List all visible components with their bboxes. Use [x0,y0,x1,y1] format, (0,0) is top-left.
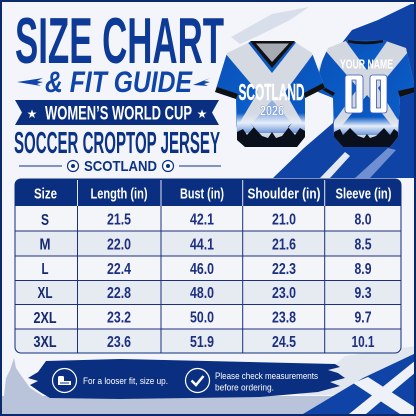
ribbon banner [15,100,219,125]
row L: 22.3 [272,261,296,278]
header labels [34,186,392,202]
row L: 46.0 [190,261,214,278]
star left: ★ [27,107,37,121]
row XL [38,285,372,302]
tip: check measurements [215,371,318,394]
icon: check mark [186,368,210,392]
Scotland label with footballs: SCOTLAND [84,158,157,175]
row M: 21.6 [272,236,296,254]
row L: 8.9 [354,261,372,278]
tip: looser fit: For a looser fit, size up. [83,376,168,387]
jersey: front [215,41,325,147]
row 3XL: 23.6 [107,334,131,351]
table body [15,179,401,353]
row S: 42.1 [190,212,214,228]
star right: ★ [197,107,207,121]
row 3XL: 24.5 [272,334,296,351]
row 2XL: 50.0 [190,310,214,326]
front year: 2026 [260,102,284,120]
row M: 44.1 [190,236,214,254]
header labels: Bust (in) [180,186,224,202]
background: blue brush stroke [231,4,416,178]
row 3XL: 51.9 [190,334,214,351]
row S: 8.0 [354,212,372,228]
row XL: 22.8 [107,285,131,302]
row M [40,236,372,254]
banner text: WOMEN’S WORLD CUP [45,104,192,124]
subtitle: fit guide: & FIT GUIDE [45,66,193,99]
row 2XL: 2XL [34,310,57,327]
Scotland flag corner [303,353,416,414]
front team name: SCOTLAND [238,79,304,105]
row XL: XL [38,285,53,302]
row XL: 23.0 [272,285,296,302]
header labels: Sleeve (in) [336,186,392,202]
tip: check measurements: Please check measurements [215,371,318,382]
row S: S [41,212,49,229]
row 2XL: 23.8 [272,310,296,326]
header labels: Size [34,186,57,202]
row 2XL: 23.2 [107,310,131,326]
row 2XL [34,310,372,327]
jersey: back [318,40,414,147]
row L [42,261,372,278]
row M: 8.5 [354,236,372,254]
row M: M [40,236,50,254]
table header [15,179,401,206]
Scotland label with footballs [19,158,221,175]
row 3XL [34,334,375,351]
row 3XL: 3XL [34,334,57,351]
row S: 21.5 [107,212,131,228]
footer brush banner [28,359,345,399]
size table [15,179,401,353]
header labels: Shoulder (in) [248,186,320,202]
row L: 22.4 [107,261,131,278]
tip: check measurements: before ordering. [215,382,274,394]
collar [254,42,290,63]
icon: measuring tape [52,368,76,392]
title: SIZE CHART [15,4,224,77]
row S [41,212,372,229]
row S: 21.0 [272,212,296,228]
background: crowd silhouette [2,346,416,414]
row XL: 48.0 [190,285,214,302]
header labels: Length (in) [90,186,148,202]
row M: 22.0 [107,236,131,254]
row XL: 9.3 [354,285,372,302]
back number [345,75,387,113]
row L: L [42,261,49,278]
row 3XL: 10.1 [352,334,375,351]
row 2XL: 9.7 [354,310,372,326]
